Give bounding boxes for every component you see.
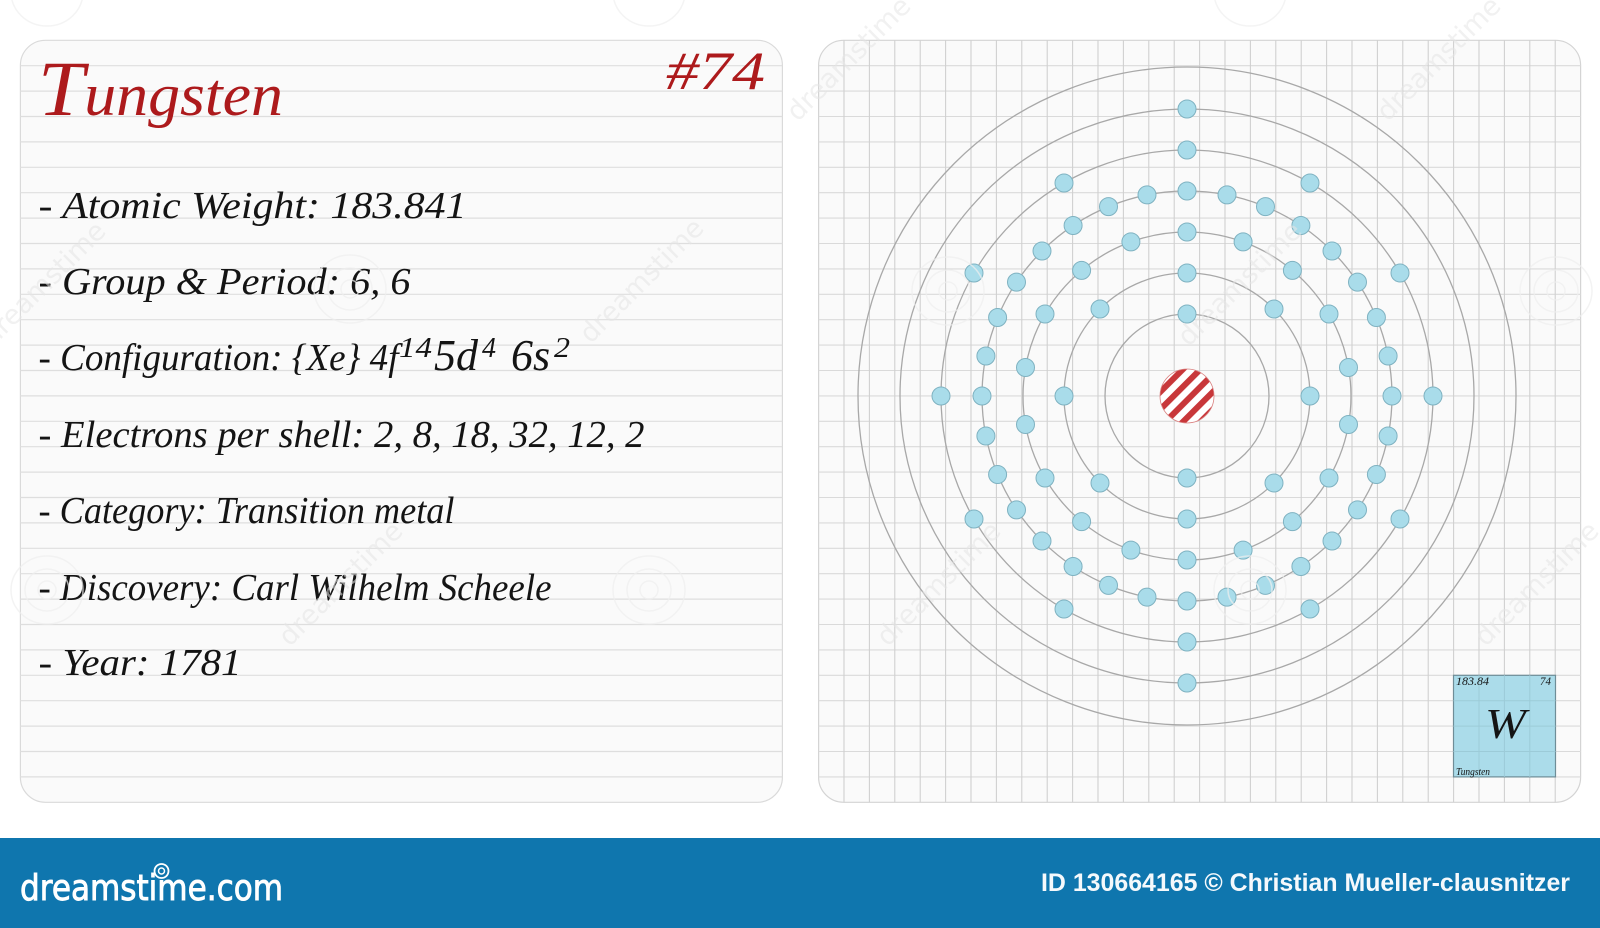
footer credit: ID 130664165 © Christian Mueller-clausnitzer (1041, 869, 1570, 897)
fact: configuration (38, 331, 570, 380)
electrons: shell 5 (932, 141, 1442, 651)
fact: configuration: 2 (554, 333, 570, 364)
watermarks: dreamstime (1172, 216, 1308, 352)
fact: configuration: 5d (434, 331, 479, 380)
fact: configuration: 14 (399, 333, 432, 364)
fact: year: - Year: 1781 (38, 642, 242, 684)
fact: group and period: - Group & Period: 6, 6 (38, 261, 411, 303)
electrons: shell 6 (1178, 100, 1196, 692)
electrons: shell 1 (1178, 305, 1196, 487)
electron shell rings (858, 67, 1516, 725)
periodic table tile: 74 (1540, 676, 1551, 688)
fact: category: - Category: Transition metal (38, 490, 454, 532)
fact: configuration: - Configuration: {Xe} 4f (38, 337, 403, 379)
fact: configuration: 4 (482, 333, 496, 364)
watermarks: dreamstime (273, 516, 409, 652)
periodic table tile: W (1485, 702, 1531, 748)
nucleus (1160, 369, 1214, 423)
fact: electrons per shell: - Electrons per shell: 2, 8, 18, 32, 12, 2 (38, 414, 644, 456)
footer bar (0, 838, 1600, 928)
electrons: shell 4 (973, 182, 1401, 610)
fact: discovery: - Discovery: Carl Wilhelm Scheele (38, 567, 552, 609)
electrons: shell 2 (1055, 264, 1319, 528)
title: Tungsten (38, 45, 283, 132)
periodic table tile (1454, 675, 1556, 778)
fact: atomic weight: - Atomic Weight: 183.841 (38, 185, 466, 227)
periodic table tile: 183.84 (1456, 676, 1489, 688)
periodic table tile: Tungsten (1456, 766, 1490, 778)
panel: element facts (20, 40, 782, 802)
footer logo spiral (154, 864, 168, 878)
electrons: shell 3 (1016, 223, 1358, 569)
atomic number: #74 (666, 41, 765, 101)
watermarks (0, 0, 1600, 652)
watermarks: dreamstime (574, 213, 710, 349)
fact: configuration: 6s (511, 331, 550, 380)
watermarks: dreamstime (871, 516, 1007, 652)
panel: atomic diagram (819, 40, 1581, 802)
footer logo text: dreamstime.com (20, 868, 283, 909)
